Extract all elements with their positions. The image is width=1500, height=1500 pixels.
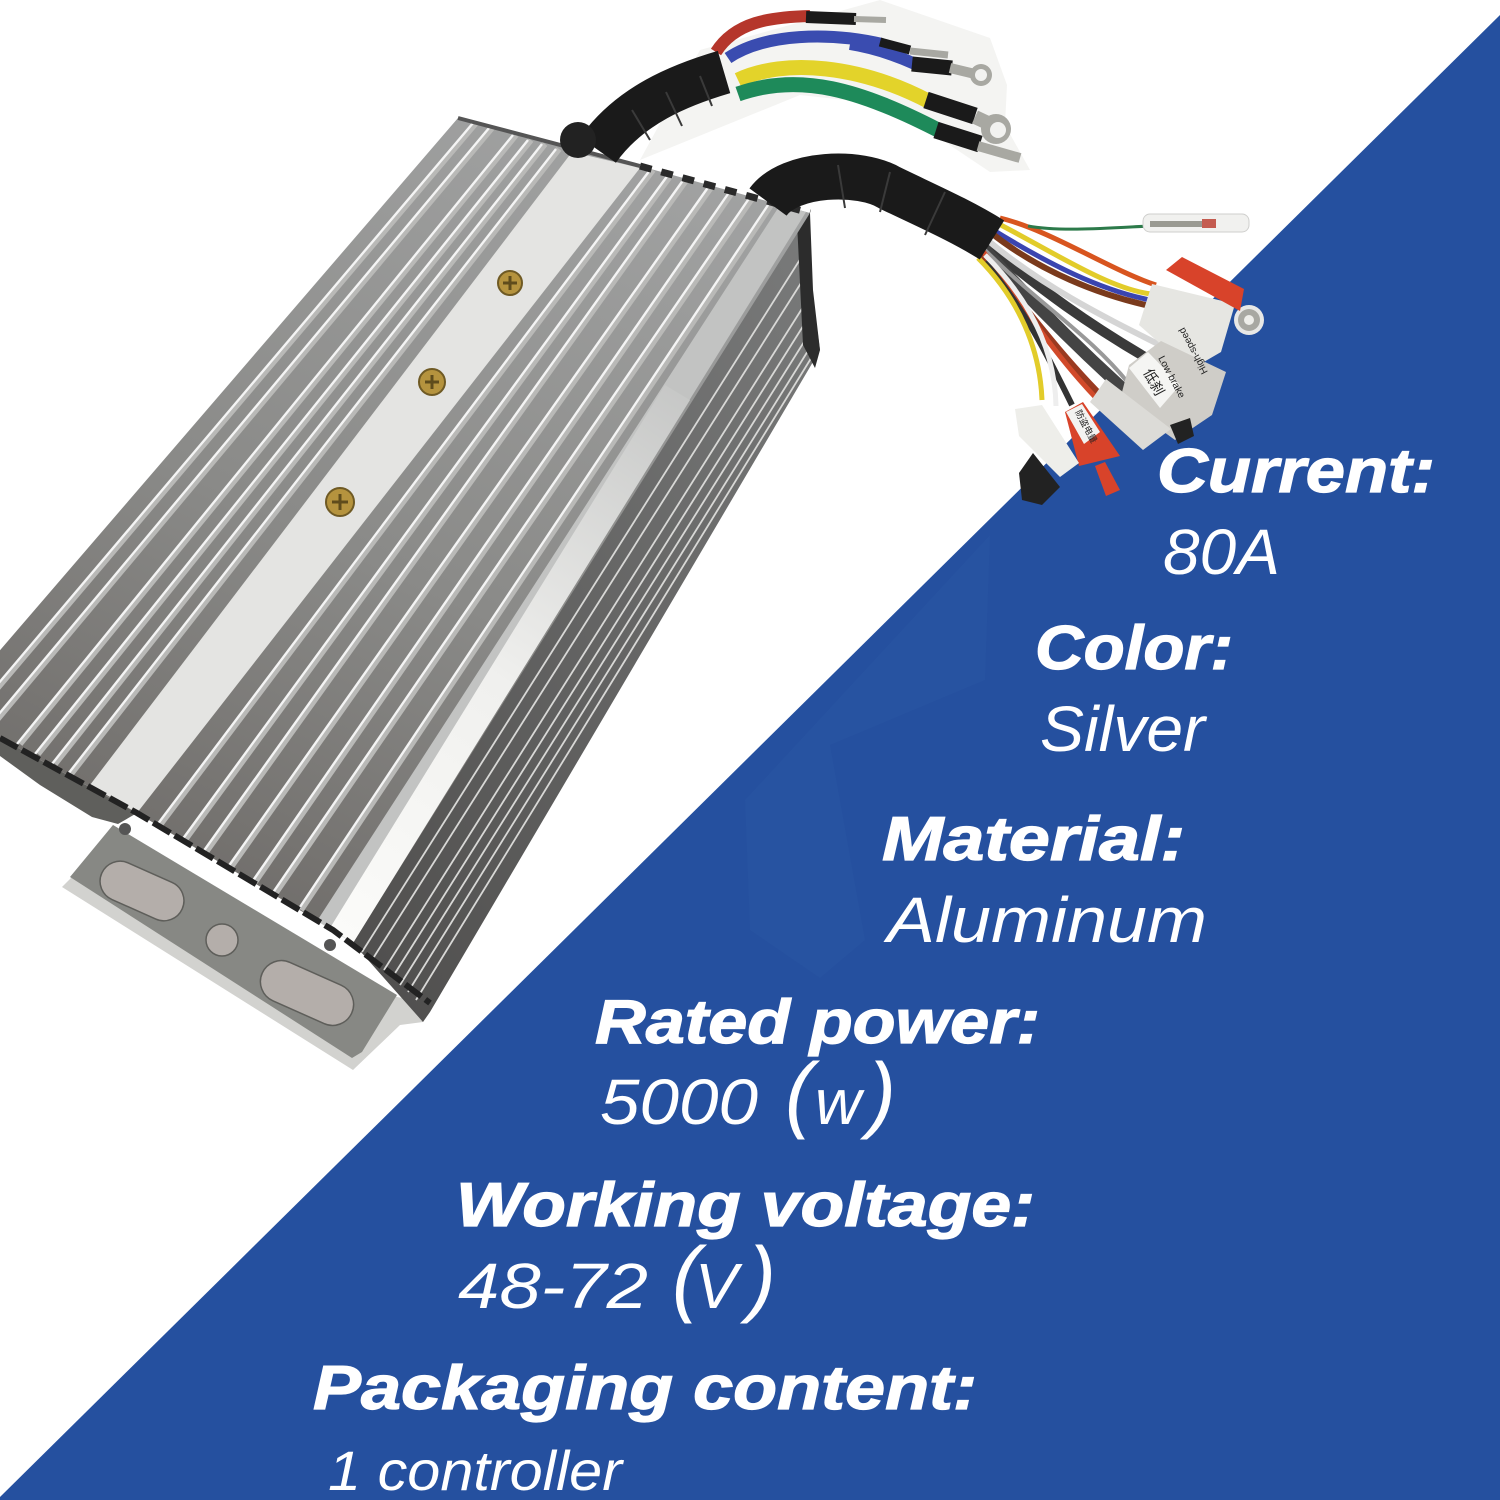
heading: Packaging content: — [313, 1354, 977, 1423]
label: low brake: Low brake — [1155, 354, 1187, 401]
product photo: motor controller — [0, 0, 1264, 1070]
value: ) — [739, 1230, 776, 1324]
small black plug — [1170, 418, 1194, 444]
power wires — [716, 16, 1020, 158]
white connector — [1015, 405, 1079, 477]
top face cooling fins — [0, 123, 773, 910]
photo cut-out halo — [640, 0, 1030, 172]
spec: working voltage — [456, 1171, 1035, 1324]
housing lower side plate — [0, 738, 137, 824]
main red and white connector — [1139, 257, 1264, 370]
label: low brake Chinese: 低刹 — [1140, 366, 1168, 398]
spec: color — [1035, 614, 1233, 765]
value: 48-72 — [458, 1250, 648, 1322]
insulated spade terminal — [1143, 214, 1249, 232]
top rim — [458, 118, 640, 166]
centre mounting strip — [90, 152, 640, 813]
screws — [326, 271, 522, 516]
controller dark end cap — [797, 213, 820, 368]
value: Aluminum — [883, 884, 1207, 956]
heading: Color: — [1035, 614, 1233, 683]
spec: current — [1157, 437, 1435, 588]
power wire spiral sleeve — [560, 72, 724, 158]
controller top face — [0, 118, 810, 943]
value — [600, 1046, 896, 1140]
faint lighter patch in blue panel — [745, 535, 990, 978]
value: ) — [859, 1046, 896, 1140]
controller right side face — [353, 212, 820, 1022]
heading: Rated power: — [595, 988, 1040, 1057]
front edge of housing — [0, 738, 430, 1003]
spec: packaging content — [313, 1354, 977, 1500]
heading: Current: — [1157, 437, 1435, 506]
label: high speed: High-speed — [1177, 325, 1211, 376]
grey connector — [1090, 379, 1171, 450]
labelled connector: high speed / low brake — [1120, 325, 1226, 440]
spec: material — [882, 805, 1207, 956]
fin end notches — [640, 166, 810, 213]
chamfer highlight — [317, 205, 806, 943]
label: anti-theft: 防盗电量 — [1073, 408, 1100, 445]
value: ( — [785, 1046, 821, 1140]
value: 5000 — [600, 1066, 758, 1138]
heading: Working voltage: — [456, 1171, 1035, 1240]
mounting bracket — [62, 823, 430, 1070]
value: Silver — [1040, 693, 1208, 765]
heading: Material: — [882, 805, 1185, 874]
value — [458, 1230, 776, 1324]
value: ( — [672, 1230, 708, 1324]
value: V — [695, 1250, 743, 1322]
red connector — [1065, 402, 1120, 496]
signal wire spiral sleeve — [768, 165, 992, 240]
value: 80A — [1163, 516, 1280, 588]
side face cooling fins — [362, 250, 818, 1000]
chamfer bright band — [330, 385, 690, 943]
signal wires fan — [978, 218, 1160, 406]
spec: rated power — [595, 988, 1040, 1140]
black connector — [1019, 453, 1060, 505]
value: w — [815, 1066, 865, 1138]
